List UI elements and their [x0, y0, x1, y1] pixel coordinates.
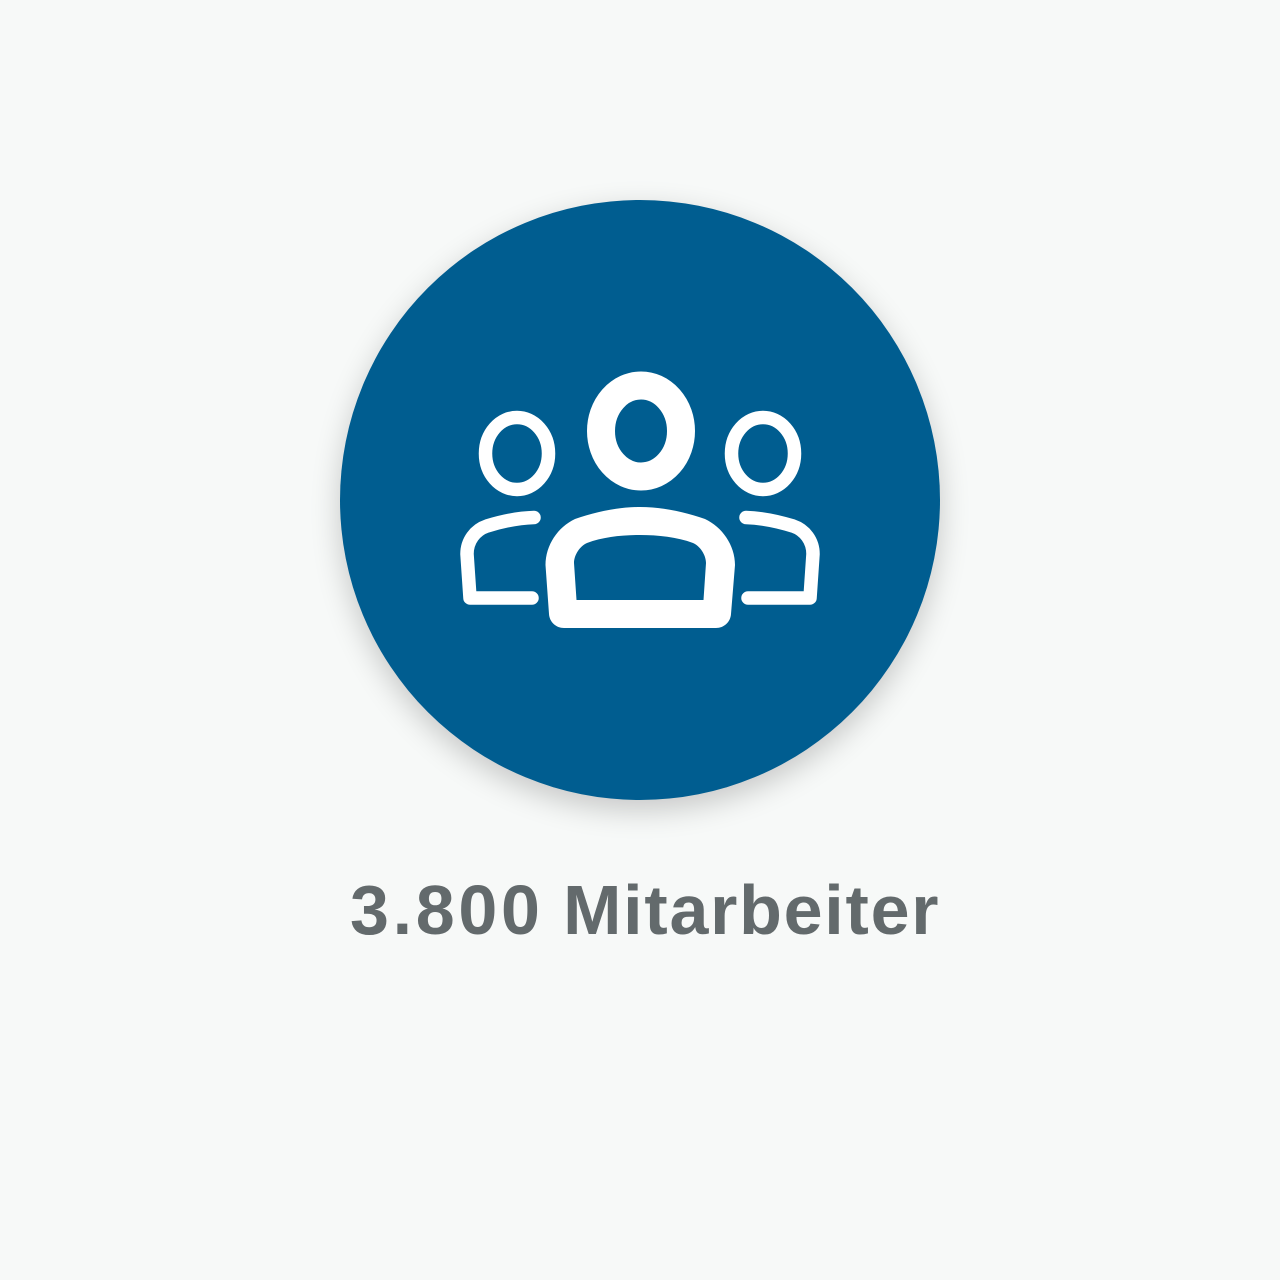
panel: blue circle: [340, 200, 940, 800]
icon: left person: [467, 418, 548, 598]
icon: right person: [732, 418, 813, 598]
icon: centre person: [546, 386, 735, 628]
heading: employee count: 3.800 Mitarbeiter: [350, 871, 940, 949]
